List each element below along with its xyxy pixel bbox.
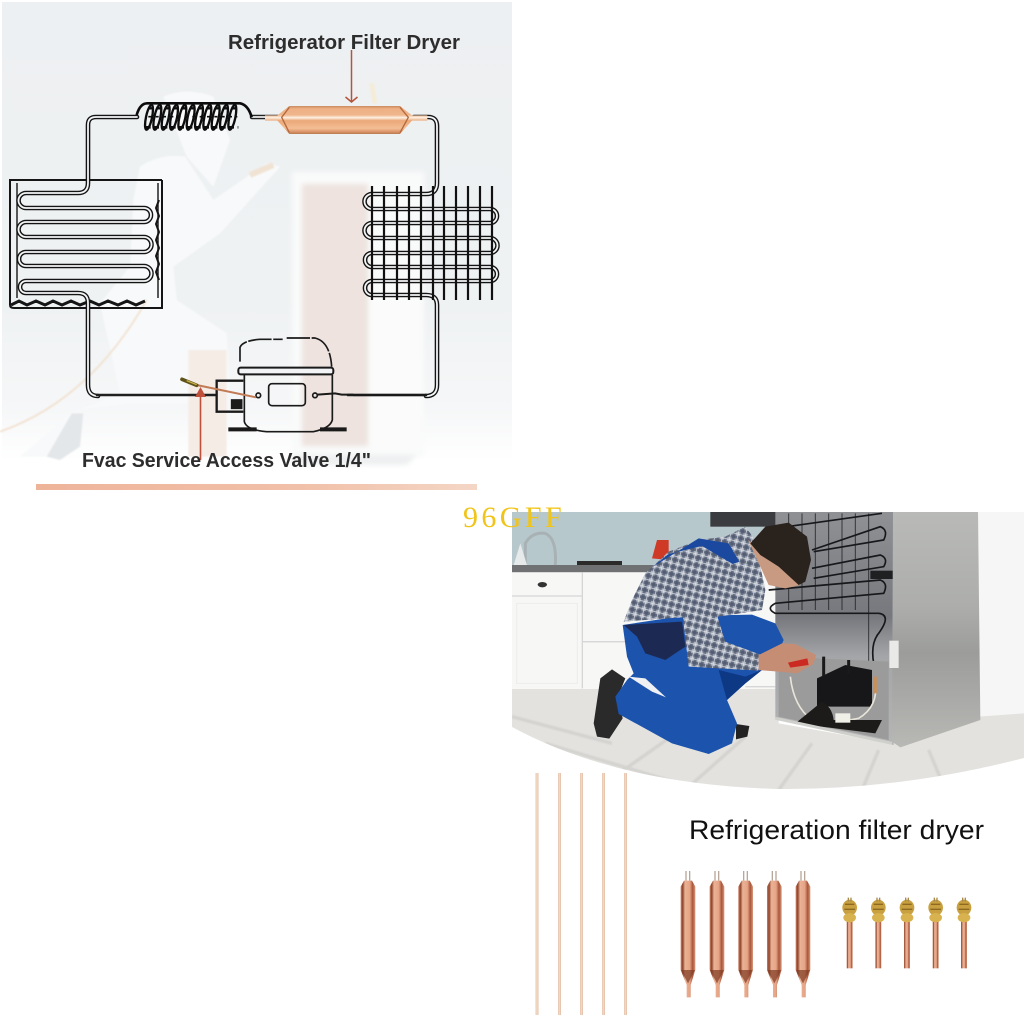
kitchen wall (512, 512, 779, 567)
compressor compartment (775, 657, 892, 743)
filter dryer 2 (710, 871, 724, 997)
technician (594, 523, 816, 754)
valve 1 (842, 898, 857, 968)
filter dryer 4 (767, 871, 782, 997)
floor (512, 688, 1024, 790)
panel: filter dryers (681, 871, 810, 997)
trouser shading (719, 670, 762, 700)
hair (750, 523, 811, 585)
filter dryer 1 (681, 871, 695, 997)
condenser wires (372, 186, 492, 300)
rod 3 (580, 773, 583, 1015)
evaporator box (10, 180, 162, 308)
service access valve (182, 379, 256, 397)
compressor (217, 338, 427, 432)
service valve pointer arrow (195, 387, 206, 460)
panel: copper rods (536, 773, 627, 1015)
white cabinets (512, 572, 775, 689)
panel: refrigeration circuit diagram (0, 2, 512, 512)
face and neck (748, 540, 800, 588)
valve 5 (957, 898, 971, 968)
valve 2 (871, 898, 886, 968)
trouser hem (629, 677, 666, 697)
work boot (594, 669, 625, 739)
panel: service valves (842, 898, 971, 968)
overall strap (652, 538, 739, 567)
copper tube (36, 484, 477, 490)
hands (759, 643, 816, 673)
valve 4 (928, 898, 943, 968)
heading: filter dryer label: Refrigerator Filter Dryer (228, 32, 460, 54)
valve 3 (900, 898, 914, 968)
filter dryer (265, 106, 427, 134)
refrigerator side panel (892, 512, 980, 747)
filter dryer pointer arrow (346, 50, 358, 102)
capillary coil (137, 103, 252, 130)
panel: technician repairing refrigerator photo (512, 512, 1024, 790)
red pliers (788, 658, 809, 668)
rear boot (736, 724, 749, 739)
ghosted welder figure (0, 83, 375, 460)
refrigerator back with condenser coil (769, 512, 899, 745)
blue trousers (615, 615, 784, 754)
rod 4 (602, 773, 605, 1015)
diagram background (2, 2, 512, 512)
filter dryer 3 (738, 871, 753, 997)
plaid shirt (624, 527, 765, 622)
right wall (975, 512, 1024, 718)
watermark: 96GFF (463, 501, 565, 534)
rod 5 (624, 773, 627, 1015)
heading: refrigeration filter dryer: Refrigeration filter dryer (689, 815, 984, 845)
rod 1 (536, 773, 538, 1015)
rod 2 (558, 773, 561, 1015)
tool belt (624, 622, 685, 660)
filter dryer 5 (796, 871, 810, 997)
kitchen counter and faucet (512, 533, 669, 572)
refrigerator edge trim (889, 641, 899, 668)
shirt sleeve (682, 616, 760, 671)
refrigerant tube circuit (19, 117, 497, 396)
label: service access valve: Fvac Service Access Valve 1/4" (82, 450, 371, 472)
ghosted refrigerator backdrop (292, 172, 424, 465)
